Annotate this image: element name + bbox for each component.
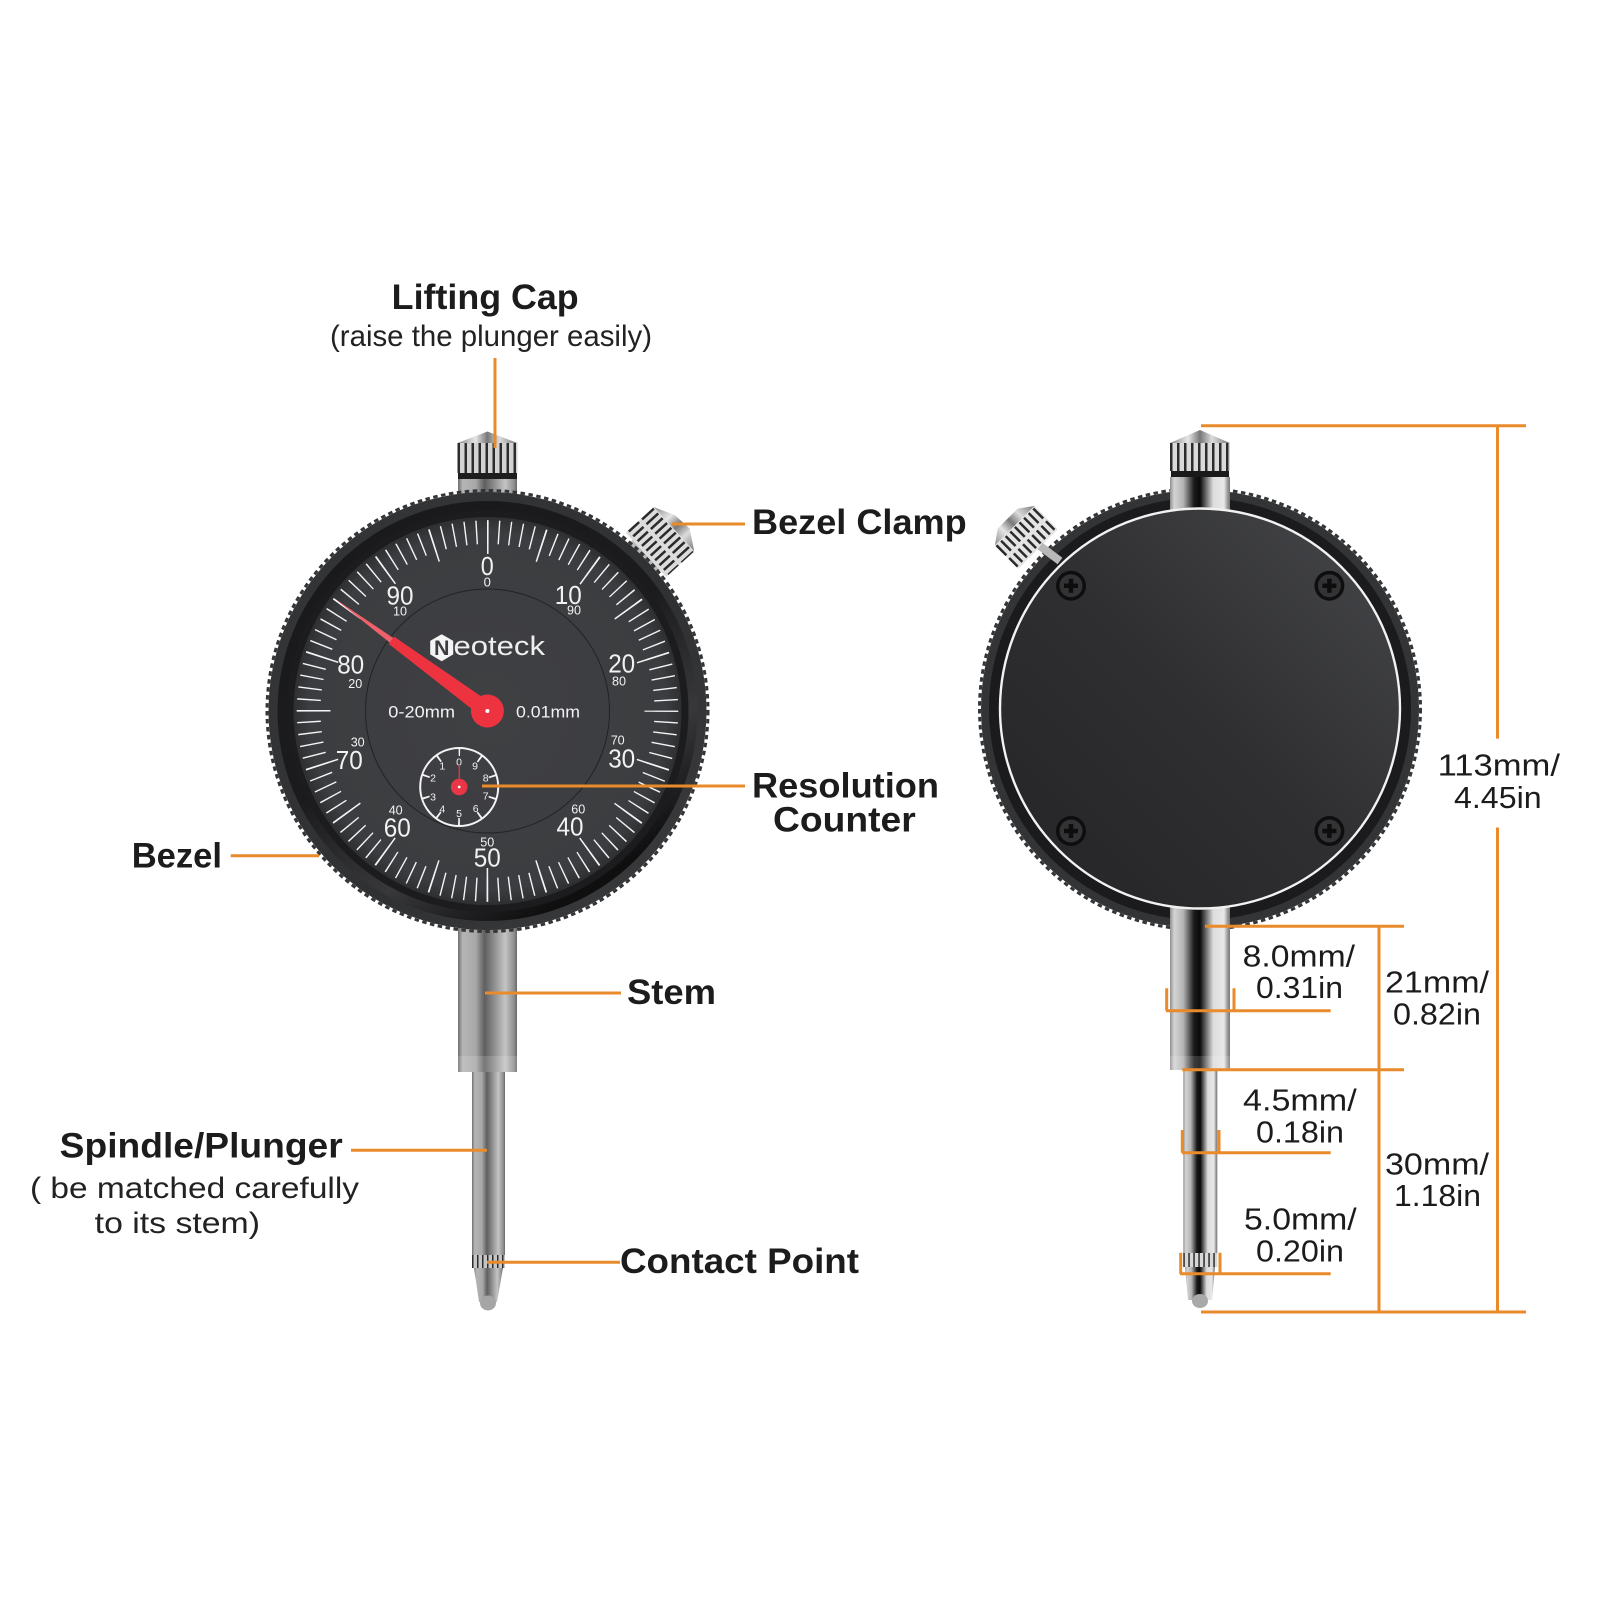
screw bottom left bbox=[1056, 816, 1086, 846]
callout: lifting cap: (raise the plunger easily) bbox=[330, 320, 652, 353]
range text bbox=[388, 702, 580, 721]
callout: resolution counter bbox=[482, 766, 939, 840]
scale numbers: 30 bbox=[351, 734, 365, 749]
scale numbers: 40 bbox=[389, 803, 403, 818]
spindle plunger (back) bbox=[1183, 1070, 1217, 1254]
back plate bbox=[1000, 508, 1400, 908]
scale numbers: 10 bbox=[393, 604, 407, 619]
contact point (front) bbox=[472, 1255, 505, 1310]
dimension: spindle length 30mm bbox=[1379, 1070, 1489, 1312]
scale numbers: 70 bbox=[336, 745, 363, 775]
dimension: overall height 113mm: 113mm/ bbox=[1438, 748, 1560, 783]
scale numbers: 10 bbox=[555, 580, 582, 610]
dimension: overall height 113mm bbox=[1201, 426, 1560, 1312]
resolution counter subdial: 0 bbox=[456, 756, 462, 768]
callout: spindle plunger bbox=[30, 1127, 487, 1240]
callout: lifting cap bbox=[330, 278, 652, 448]
dimension: contact point diameter 5.0mm bbox=[1180, 1201, 1357, 1274]
lifting cap (front) bbox=[458, 432, 518, 494]
resolution counter subdial: 8 bbox=[483, 772, 489, 784]
scale numbers: 60 bbox=[384, 812, 411, 842]
lifting cap (back) bbox=[1170, 430, 1230, 477]
panel: back view dial indicator bbox=[980, 430, 1420, 1308]
callout: bezel clamp: Bezel Clamp bbox=[752, 503, 967, 542]
logo: Neoteck bbox=[430, 631, 546, 661]
dimension: overall height 113mm: 4.45in bbox=[1454, 780, 1542, 815]
callout: spindle plunger: ( be matched carefully bbox=[30, 1172, 359, 1205]
resolution counter subdial: 9 bbox=[472, 760, 478, 772]
dimension: stem length 21mm: 0.82in bbox=[1393, 996, 1481, 1031]
scale numbers: 60 bbox=[571, 802, 585, 817]
resolution counter subdial: 6 bbox=[473, 803, 479, 815]
callout: resolution counter: Resolution bbox=[752, 766, 939, 805]
callout: resolution counter: Counter bbox=[773, 801, 916, 840]
callout: spindle plunger: Spindle/Plunger bbox=[60, 1127, 343, 1166]
clamp thread (back) bbox=[1040, 546, 1060, 561]
scale numbers: 50 bbox=[474, 843, 501, 873]
scale numbers bbox=[336, 551, 635, 873]
logo: Neoteck: N bbox=[434, 637, 450, 660]
resolution counter subdial: 3 bbox=[430, 791, 436, 803]
scale numbers: 90 bbox=[386, 581, 414, 611]
dimension: contact point diameter 5.0mm: 0.20in bbox=[1256, 1234, 1344, 1269]
scale numbers: 30 bbox=[608, 743, 635, 773]
scale numbers: 80 bbox=[612, 674, 626, 689]
spindle plunger (front) bbox=[472, 1072, 505, 1256]
scale numbers: 90 bbox=[567, 603, 581, 618]
dimension: spindle diameter 4.5mm bbox=[1182, 1083, 1357, 1153]
screw top left bbox=[1056, 571, 1086, 601]
stem (back) bbox=[1170, 477, 1230, 1070]
main needle bbox=[335, 599, 504, 728]
callout: spindle plunger: to its stem) bbox=[95, 1207, 260, 1240]
resolution counter subdial: 7 bbox=[483, 791, 489, 803]
resolution counter subdial: 5 bbox=[456, 808, 462, 820]
screws bbox=[1056, 571, 1344, 846]
bezel clamp (back) bbox=[988, 499, 1058, 569]
scale ticks bbox=[309, 532, 666, 890]
logo: Neoteck: eoteck bbox=[454, 631, 546, 661]
dial face bbox=[294, 517, 682, 905]
resolution counter subdial: 2 bbox=[430, 772, 436, 784]
range text: 0-20mm bbox=[388, 702, 455, 721]
dimension: spindle length 30mm: 30mm/ bbox=[1385, 1146, 1489, 1181]
scale numbers: 20 bbox=[608, 648, 635, 678]
dimension: contact point diameter 5.0mm: 5.0mm/ bbox=[1244, 1201, 1357, 1236]
scale numbers: 0 bbox=[484, 574, 491, 589]
callout: stem: Stem bbox=[627, 973, 716, 1012]
dimension: stem diameter 8.0mm bbox=[1166, 939, 1355, 1011]
dimension: stem length 21mm: 21mm/ bbox=[1385, 965, 1489, 1000]
screw top right bbox=[1314, 571, 1344, 601]
scale numbers: 0 bbox=[481, 551, 494, 581]
bezel (back) bbox=[980, 488, 1420, 930]
screw bottom right bbox=[1314, 816, 1344, 846]
range text: 0.01mm bbox=[516, 702, 580, 721]
dimension: stem diameter 8.0mm: 8.0mm/ bbox=[1243, 939, 1355, 974]
scale numbers: 80 bbox=[337, 649, 364, 679]
dimension: spindle length 30mm: 1.18in bbox=[1394, 1178, 1481, 1213]
stem (front) bbox=[458, 915, 517, 1072]
bezel clamp (front) bbox=[612, 499, 703, 589]
panel: front view dial indicator bbox=[267, 432, 708, 1310]
callout: bezel: Bezel bbox=[132, 837, 222, 876]
scale numbers: 50 bbox=[480, 834, 494, 849]
callout: lifting cap: Lifting Cap bbox=[392, 278, 579, 317]
dimension: stem diameter 8.0mm: 0.31in bbox=[1256, 970, 1343, 1005]
dimension: spindle diameter 4.5mm: 0.18in bbox=[1256, 1115, 1344, 1150]
scale numbers: 20 bbox=[348, 676, 362, 691]
bezel bbox=[267, 490, 708, 932]
dimension: stem length 21mm bbox=[1182, 926, 1489, 1070]
callout: contact point: Contact Point bbox=[620, 1242, 859, 1281]
contact point (back) bbox=[1183, 1253, 1217, 1308]
scale numbers: 40 bbox=[556, 812, 584, 842]
resolution counter subdial bbox=[420, 748, 498, 826]
resolution counter subdial: 1 bbox=[439, 760, 445, 772]
resolution counter subdial: 4 bbox=[439, 804, 445, 816]
dimension: spindle diameter 4.5mm: 4.5mm/ bbox=[1243, 1083, 1357, 1118]
scale numbers: 70 bbox=[611, 733, 625, 748]
